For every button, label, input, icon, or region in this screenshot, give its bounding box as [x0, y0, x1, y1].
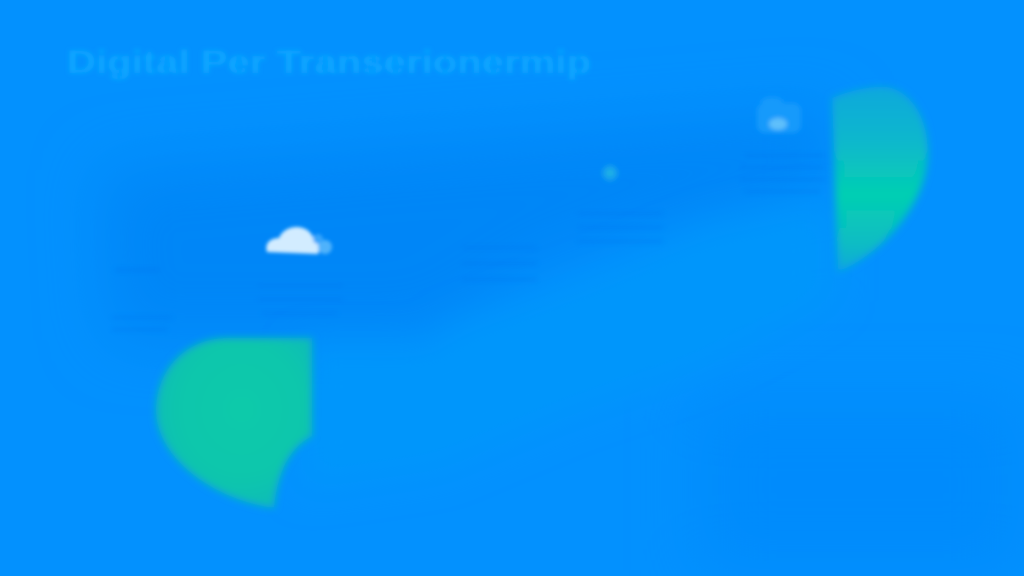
staircase chart	[156, 87, 928, 508]
text block: step 2	[258, 284, 343, 315]
icon: top right cloud	[757, 97, 801, 133]
darker central haze	[100, 110, 830, 340]
step 1 green shape	[156, 338, 312, 508]
icon: cloud	[266, 227, 332, 254]
text block: step 4	[578, 212, 663, 243]
lower right tint	[700, 400, 1020, 570]
faint text blocks	[112, 154, 825, 331]
text block: step 3	[462, 246, 537, 281]
text block: step 5	[740, 154, 825, 193]
title: Digital Per Transerionermip	[67, 44, 591, 80]
step 6 green shape	[832, 87, 928, 272]
light band across steps	[300, 200, 835, 490]
text block: step 1	[112, 268, 172, 331]
icon: small glow dot	[602, 165, 618, 181]
